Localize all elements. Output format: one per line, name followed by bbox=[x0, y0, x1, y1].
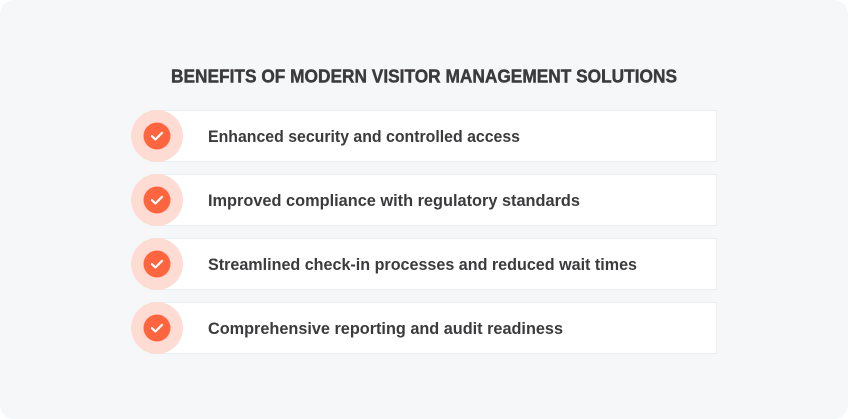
item text: Comprehensive reporting and audit readiness bbox=[208, 320, 563, 338]
icon: check badge bbox=[131, 174, 183, 226]
icon: check badge bbox=[131, 238, 183, 290]
list item: reporting bbox=[131, 302, 716, 354]
list item: compliance bbox=[131, 174, 716, 226]
list item: security bbox=[131, 110, 716, 162]
row card bbox=[150, 238, 716, 290]
list item: check-in bbox=[131, 238, 716, 290]
item text: Streamlined check-in processes and reduced wait times bbox=[208, 256, 637, 274]
row card bbox=[150, 110, 716, 162]
item text: Improved compliance with regulatory standards bbox=[208, 192, 580, 210]
title: BENEFITS OF MODERN VISITOR MANAGEMENT SOLUTIONS bbox=[171, 66, 677, 86]
item text: Enhanced security and controlled access bbox=[208, 128, 520, 146]
icon: check badge bbox=[131, 302, 183, 354]
row card bbox=[150, 174, 716, 226]
row card bbox=[150, 302, 716, 354]
icon: check badge bbox=[131, 110, 183, 162]
